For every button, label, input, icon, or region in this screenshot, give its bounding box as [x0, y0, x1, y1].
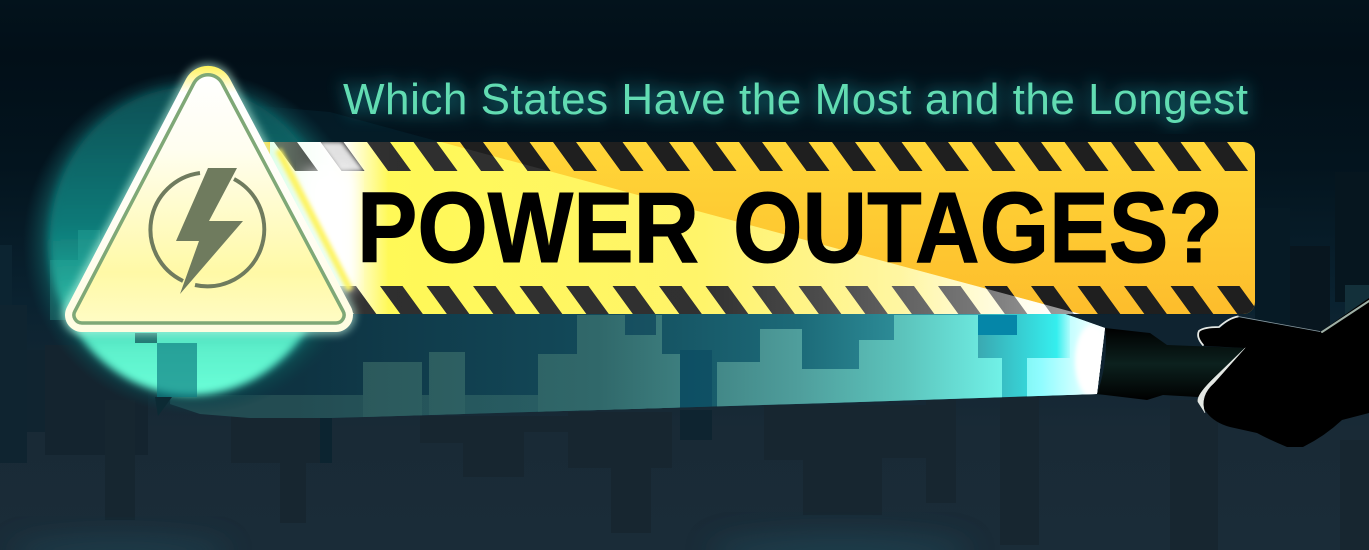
title: [357, 172, 1223, 284]
title: OUTAGES?: [733, 172, 1223, 284]
banner: light cone: [270, 142, 1080, 314]
beam: lit buildings: [165, 315, 1106, 423]
title: POWER: [357, 172, 699, 284]
subtitle: Which States Have the Most and the Longest: [343, 75, 1248, 124]
light disc behind sign: [23, 71, 367, 416]
banner: hazard stripes bottom: [340, 286, 1255, 314]
warning sign: [65, 66, 353, 332]
flashlight: [1097, 328, 1245, 400]
hand silhouette: [1197, 298, 1369, 447]
banner: stripe wash: [270, 142, 1080, 314]
caution banner: [264, 142, 1255, 314]
beam: bulb glare: [1075, 325, 1109, 397]
flashlight beam: [160, 100, 1110, 425]
sign: plate: [65, 66, 353, 332]
subtitle: Which States Have the Most and the Longest: [343, 75, 1248, 124]
banner: hazard stripes top: [270, 142, 1255, 171]
skyline: back buildings: [0, 172, 1369, 550]
hand: rim light: [1198, 301, 1369, 413]
floor glow: [10, 534, 970, 550]
sign: inner outline: [74, 75, 344, 323]
icon: lightning in circle: [150, 168, 264, 294]
